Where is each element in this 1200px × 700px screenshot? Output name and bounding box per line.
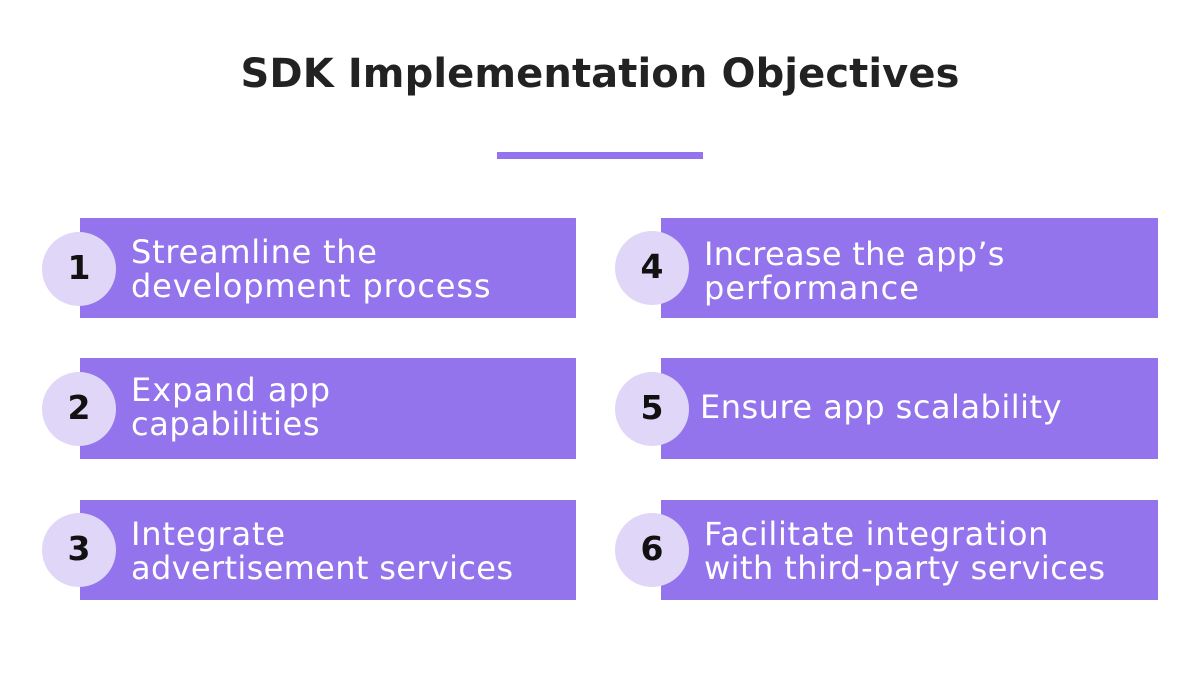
item 1: Streamline the — [131, 233, 378, 271]
item 2 — [42, 358, 576, 459]
item 4: Increase the app’s — [704, 235, 1005, 273]
item 3 — [42, 500, 576, 600]
item 3: advertisement services — [131, 549, 513, 587]
item 2: Expand app — [131, 371, 331, 409]
item 5 — [615, 358, 1158, 459]
item 4: 4 — [641, 247, 663, 286]
item 5: Ensure app scalability — [700, 388, 1062, 426]
item 6 — [615, 500, 1158, 600]
item 2: 2 — [68, 388, 90, 427]
item 4 — [615, 218, 1158, 318]
item 3: Integrate — [131, 515, 286, 553]
item 2: capabilities — [131, 405, 320, 443]
item 1: 1 — [68, 248, 90, 287]
item 3: 3 — [68, 529, 90, 568]
title underline — [497, 152, 703, 159]
item 6: with third-party services — [704, 549, 1106, 587]
item 6: Facilitate integration — [704, 515, 1049, 553]
title: SDK Implementation Objectives — [240, 51, 960, 97]
item 5: 5 — [641, 388, 663, 427]
item 1 — [42, 218, 576, 318]
item 6: 6 — [641, 529, 663, 568]
item 1: development process — [131, 267, 491, 305]
item 4: performance — [704, 269, 920, 307]
